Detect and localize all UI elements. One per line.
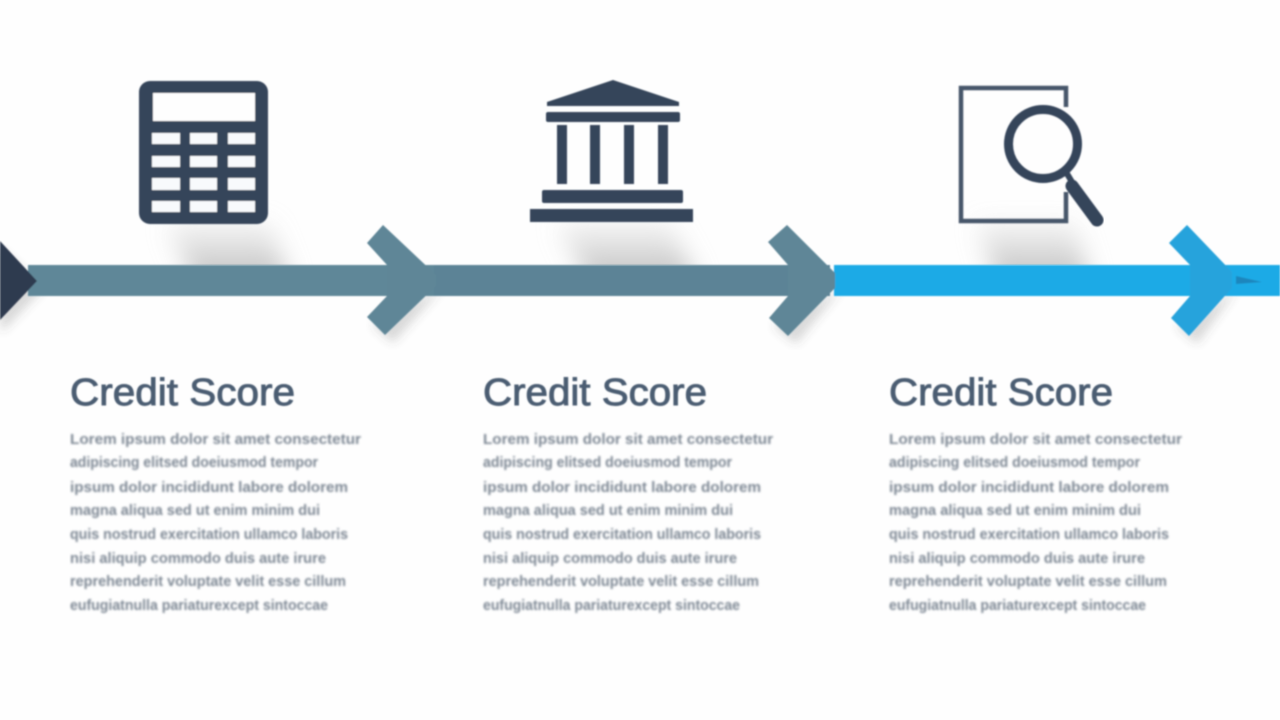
chevron 3 (1169, 225, 1232, 336)
body text 3: nisi aliquip commodo duis aute irure (889, 551, 1145, 567)
body text 3: magna aliqua sed ut enim minim dui (889, 503, 1141, 519)
column 2 text (483, 372, 773, 614)
body text 3: Lorem ipsum dolor sit amet consectetur (889, 432, 1182, 448)
body text 1 (70, 432, 361, 614)
body text 1: eufugiatnulla pariaturexcept sintoccae (70, 598, 328, 614)
chevron 2 (768, 225, 835, 336)
body text 1: Lorem ipsum dolor sit amet consectetur (70, 432, 361, 448)
segment 1 (28, 265, 436, 296)
body text 2: nisi aliquip commodo duis aute irure (483, 551, 737, 567)
body text 2 (483, 432, 773, 614)
body text 2: eufugiatnulla pariaturexcept sintoccae (483, 598, 740, 614)
icon shadows (170, 223, 1096, 265)
body text 3: ipsum dolor incididunt labore dolorem (889, 480, 1169, 496)
body text 1: adipiscing elitsed doeiusmod tempor (70, 455, 318, 471)
icon: calculator (139, 81, 268, 224)
body text 1: magna aliqua sed ut enim minim dui (70, 503, 320, 519)
body text 1: reprehenderit voluptate velit esse cillum (70, 574, 346, 590)
heading 1: Credit Score (70, 372, 295, 414)
segment 2 (434, 265, 830, 296)
segment 3 (834, 265, 1280, 296)
body text 2: quis nostrud exercitation ullamco laboris (483, 527, 761, 543)
body text 3: adipiscing elitsed doeiusmod tempor (889, 455, 1140, 471)
body text 3: eufugiatnulla pariaturexcept sintoccae (889, 598, 1146, 614)
chevron 1 (367, 225, 436, 335)
column 3 text (889, 372, 1182, 614)
icon: bank building (530, 80, 693, 222)
body text 1: quis nostrud exercitation ullamco laboris (70, 527, 348, 543)
start marker (0, 241, 37, 320)
body text 2: reprehenderit voluptate velit esse cillum (483, 574, 759, 590)
column 1 text (70, 372, 361, 614)
body text 2: magna aliqua sed ut enim minim dui (483, 503, 733, 519)
timeline arrow (0, 225, 1280, 344)
arrow end mark (1236, 276, 1262, 284)
heading 3: Credit Score (889, 372, 1113, 414)
icon: document with magnifier (961, 88, 1097, 221)
body text 3 (889, 432, 1182, 614)
body text 2: adipiscing elitsed doeiusmod tempor (483, 455, 732, 471)
body text 1: ipsum dolor incididunt labore dolorem (70, 480, 348, 496)
body text 3: quis nostrud exercitation ullamco laboris (889, 527, 1169, 543)
body text 3: reprehenderit voluptate velit esse cillum (889, 574, 1167, 590)
body text 2: Lorem ipsum dolor sit amet consectetur (483, 432, 773, 448)
body text 2: ipsum dolor incididunt labore dolorem (483, 480, 761, 496)
body text 1: nisi aliquip commodo duis aute irure (70, 551, 326, 567)
chevron shadows (0, 249, 1238, 344)
heading 2: Credit Score (483, 372, 707, 414)
